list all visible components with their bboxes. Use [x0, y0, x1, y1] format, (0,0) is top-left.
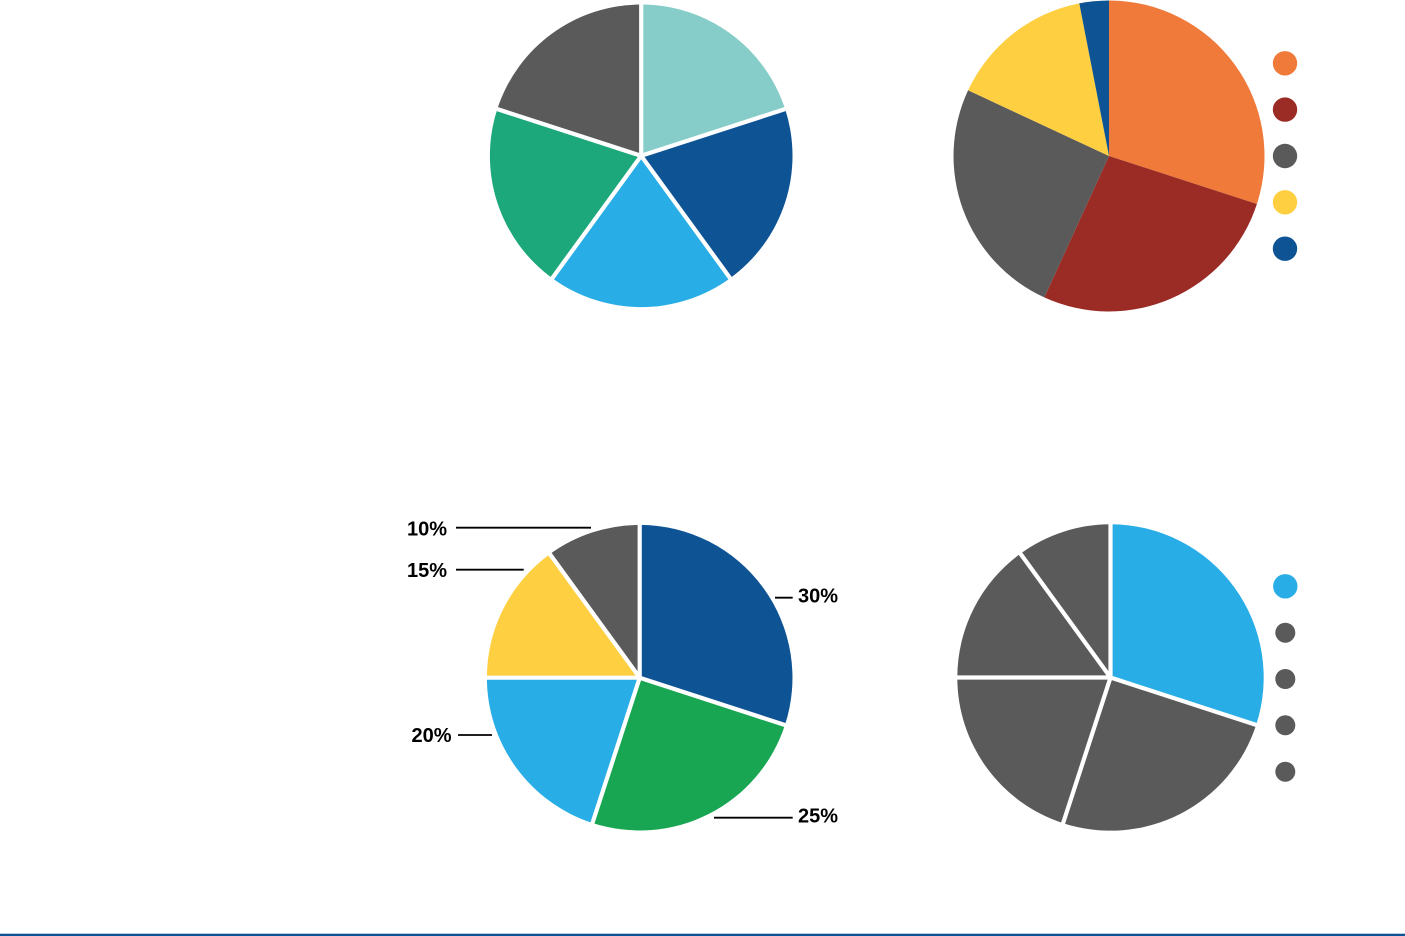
- slice: gray 10 percent: [1020, 524, 1110, 678]
- slice: 20 percent sky blue: [487, 678, 640, 823]
- slice: green: [490, 109, 641, 278]
- slice: 30 percent dark blue: [640, 525, 792, 725]
- slice: orange: [1109, 0, 1265, 204]
- label: 10% with leader line: 10%: [407, 518, 447, 540]
- label: 25% with leader line: [714, 806, 838, 828]
- label: 20% with leader line: 20%: [412, 725, 452, 747]
- slice: dark blue: [641, 109, 793, 278]
- legend: bottom right color dots: [1273, 574, 1298, 782]
- label: 25% with leader line: 25%: [798, 806, 838, 828]
- slice: red: [1044, 156, 1257, 312]
- label: 15% with leader line: [407, 560, 524, 582]
- footer rule: [0, 934, 1405, 936]
- legend: top right color dots: [1273, 51, 1297, 261]
- pie chart: labelled percentages: [484, 522, 792, 830]
- pie chart: one highlighted slice: [954, 521, 1264, 831]
- pie chart: five unequal slices, no gaps: [954, 0, 1265, 312]
- slice: 25 percent green: [592, 678, 785, 830]
- slice: gray 25 percent: [1063, 678, 1256, 831]
- label: 30% with leader line: 30%: [798, 586, 838, 608]
- slice: 10 percent gray: [550, 525, 640, 678]
- slice: yellow: [968, 3, 1109, 156]
- slice: gray 15 percent: [957, 554, 1110, 678]
- slice: 15 percent yellow: [487, 554, 640, 678]
- slice: sky blue: [552, 156, 730, 307]
- slice: highlighted sky blue: [1110, 524, 1264, 725]
- label: 20% with leader line: [412, 725, 492, 747]
- pie chart: five equal slices: [490, 0, 793, 307]
- slice: dark blue: [1079, 0, 1109, 156]
- slice: gray: [954, 90, 1109, 297]
- label: 15% with leader line: 15%: [407, 560, 447, 582]
- slice: gray 20 percent: [957, 678, 1110, 823]
- slice: gray: [497, 4, 641, 156]
- slice: teal: [641, 4, 785, 156]
- label: 30% with leader line: [775, 586, 838, 608]
